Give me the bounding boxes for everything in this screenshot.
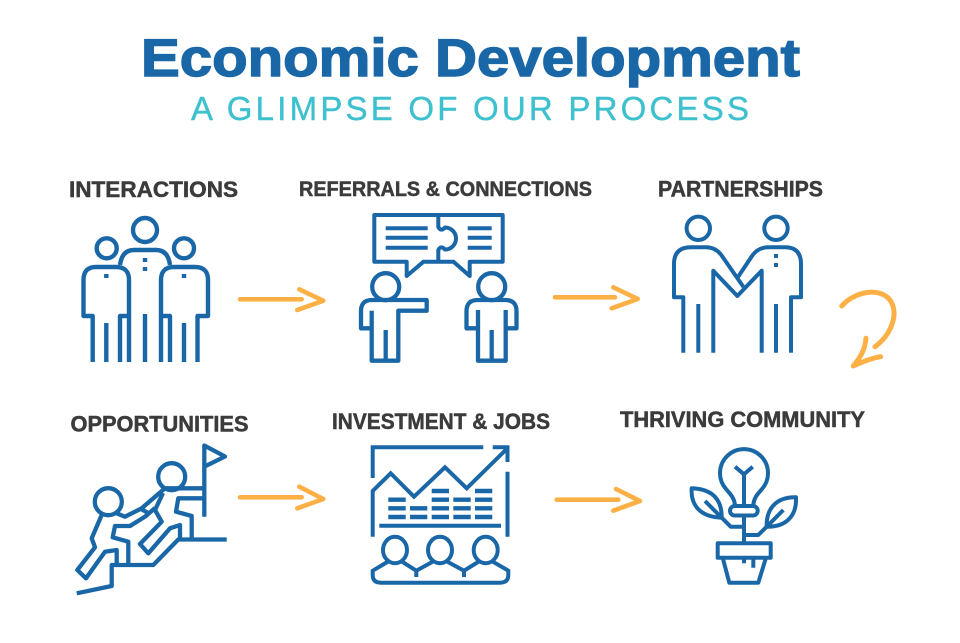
icon: light bulb plant in a pot [692, 449, 796, 583]
arrow: interactions to referrals [240, 289, 323, 310]
step: opportunities [70, 412, 248, 593]
icon: speech bubbles with puzzle join [374, 215, 503, 276]
arrow: referrals to partnerships [555, 287, 638, 308]
icon: two people shaking hands [674, 217, 801, 353]
heading: thriving community: THRIVING COMMUNITY [620, 407, 865, 432]
heading: partnerships: PARTNERSHIPS [658, 176, 823, 202]
icon: group of three people [84, 218, 208, 362]
title: Economic Development [141, 29, 800, 88]
step: referrals and connections [299, 178, 592, 361]
icon: people climbing steps to a flag [77, 446, 227, 593]
heading: interactions: INTERACTIONS [69, 177, 238, 202]
arrow: curved down to second row [842, 292, 894, 366]
heading: investment and jobs: INVESTMENT & JOBS [332, 409, 550, 434]
heading: opportunities: OPPORTUNITIES [70, 412, 248, 436]
arrow: opportunities to investment [240, 487, 323, 508]
heading: referrals and connections: REFERRALS & CONNECTIONS [299, 178, 592, 201]
step: partnerships [658, 176, 823, 353]
subtitle: A GLIMPSE OF OUR PROCESS [191, 90, 749, 127]
step: interactions [69, 177, 238, 362]
step: investment and jobs [332, 409, 550, 583]
icon: two people talking [361, 273, 516, 361]
icon: chart over audience [373, 447, 508, 583]
arrow: investment to community [557, 489, 640, 511]
step: thriving community [620, 407, 865, 583]
